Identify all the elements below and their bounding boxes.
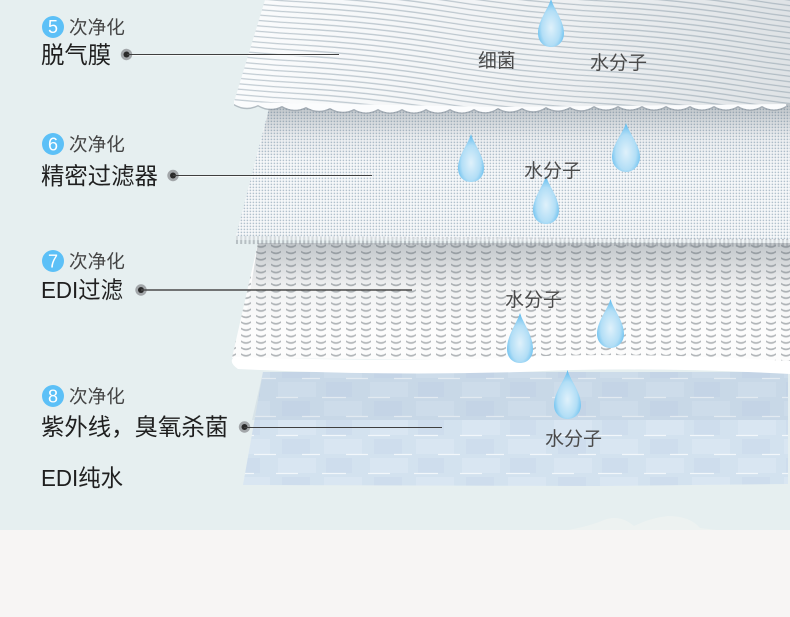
heading: step 7: [42, 250, 125, 272]
icon: water drop 1: [538, 0, 564, 47]
icon: water drop 7: [554, 370, 581, 419]
icon: water drop 2: [458, 134, 484, 182]
heading: step 5: [42, 16, 125, 38]
bottom strip: [0, 530, 790, 617]
icon: water drop 5: [507, 313, 533, 363]
scalloped edge shadow: [234, 102, 786, 114]
badge 5: 5: [48, 17, 58, 37]
layer 5: degassing membrane wavy sheet: [234, 0, 790, 114]
step text: 次净化: [69, 17, 125, 38]
layer 7: EDI chevron sheet: [232, 243, 790, 374]
pointer: EDI过滤: [135, 284, 412, 296]
layer 6: precision filter dotted sheet: [236, 104, 790, 243]
badge 6: 6: [48, 134, 58, 154]
step text: 次净化: [69, 386, 125, 407]
heading: step 6: [42, 133, 125, 155]
fringe: [236, 240, 790, 243]
icon: water drop 6: [597, 299, 624, 348]
white sheet edge: [232, 355, 790, 374]
label: 细菌: 细菌: [478, 50, 516, 71]
icon: water drop 4: [533, 176, 559, 224]
scalloped edge: [234, 100, 786, 112]
pointer: 脱气膜: [121, 49, 339, 60]
label: 水分子 layer 8: 水分子: [545, 428, 602, 450]
step text: 次净化: [69, 251, 125, 272]
pointer: 精密过滤器: [167, 170, 372, 181]
flower decoration: [568, 516, 716, 530]
icon: water drop 3: [612, 123, 640, 172]
heading: step 8: [42, 385, 125, 407]
result: EDI纯水: EDI纯水: [41, 465, 123, 491]
title: 脱气膜: 脱气膜: [41, 42, 111, 68]
title: 紫外线，臭氧杀菌: 紫外线，臭氧杀菌: [41, 414, 228, 440]
layer 8: UV ozone woven sheet: [243, 372, 788, 486]
badge 8: 8: [48, 386, 58, 406]
title: EDI过滤: EDI过滤: [41, 277, 123, 303]
label: 水分子 layer 7: 水分子: [505, 289, 562, 311]
step text: 次净化: [69, 134, 125, 155]
badge 7: 7: [48, 252, 58, 272]
label: 水分子 top: 水分子: [590, 52, 647, 74]
pointer: 紫外线，臭氧杀菌: [239, 421, 442, 433]
title: 精密过滤器: 精密过滤器: [41, 163, 158, 189]
label: 水分子 layer 6: 水分子: [524, 160, 581, 182]
